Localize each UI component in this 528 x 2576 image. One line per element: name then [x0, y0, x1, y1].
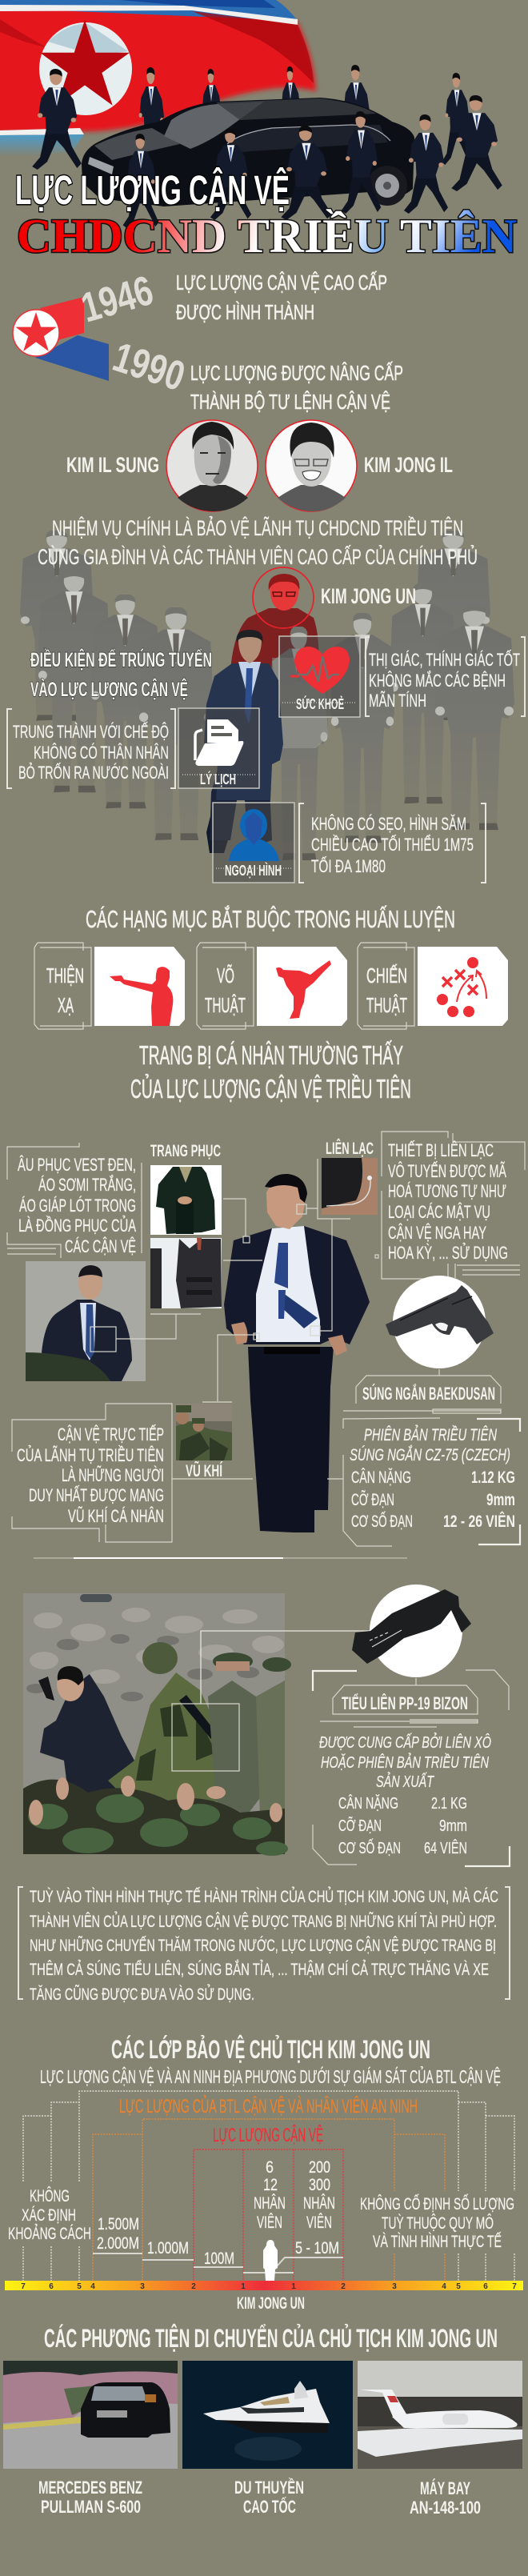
diagram: protection layers: 5	[456, 2282, 461, 2291]
runner guards in front of car	[32, 69, 502, 228]
photo: Mercedes	[3, 2361, 178, 2469]
photo: yacht	[182, 2361, 353, 2469]
panel: PP-19 Bizon specs: 9mm	[439, 1817, 467, 1835]
label: yacht: DU THUYỀN	[234, 2478, 304, 2498]
text: uniform description: ÁO SƠMI TRẮNG,	[38, 1175, 136, 1195]
panel: CZ-75 specs: CÂN NẶNG	[351, 1468, 411, 1487]
panel: martial arts	[197, 943, 347, 1029]
main figure with pistol harness	[224, 1174, 370, 1532]
panel: background check: LÝ LỊCH	[200, 771, 236, 787]
panel: tactics: CHIẾN	[366, 963, 407, 988]
label Kim Il Sung: KIM IL SUNG	[66, 453, 159, 477]
diagram: protection layers: 100M	[204, 2249, 234, 2268]
text: personal weapons: LÀ NHỮNG NGƯỜI	[62, 1465, 164, 1485]
panel: marksmanship: THIỆN	[46, 963, 84, 988]
title line 1: LỰC LƯỢNG CẬN VỆ	[15, 166, 290, 213]
diagram: protection layers: 6	[266, 2158, 274, 2177]
text: uniform description: LÀ ĐỒNG PHỤC CỦA	[18, 1216, 136, 1236]
photo: soldiers shooting	[176, 1404, 232, 1460]
text: background requirements: BỎ TRỐN RA NƯỚC NGOÀI	[18, 762, 169, 783]
text 1946 event: ĐƯỢC HÌNH THÀNH	[176, 300, 314, 324]
foreground grey guard	[270, 626, 328, 860]
diagram: protection layers: 2	[341, 2282, 346, 2291]
diagram: protection layers: 300	[309, 2176, 330, 2194]
panel: PP-19 Bizon specs: CƠ SỐ ĐẠN	[338, 1838, 401, 1857]
diagram: protection layers: 4	[442, 2282, 446, 2291]
main guard figure	[204, 630, 283, 853]
panel: CZ-75 specs: CỠ ĐẠN	[351, 1490, 394, 1509]
icon: PP-19 Bizon	[352, 1584, 471, 1677]
text 1990 event	[190, 361, 403, 414]
panel: PP-19 Bizon specs: SẢN XUẤT	[376, 1772, 434, 1791]
diagram: protection layers: XÁC ĐỊNH	[22, 2206, 76, 2225]
diagram: protection layers: 2.000M	[97, 2234, 139, 2253]
label: Mercedes: MERCEDES BENZ	[38, 2478, 142, 2498]
diagram: protection layers: 7	[512, 2282, 517, 2291]
text: personal weapons	[12, 1404, 172, 1542]
panel: appearance	[213, 803, 294, 883]
panel: CZ-75 specs: 9mm	[486, 1491, 515, 1509]
conditions heading	[30, 647, 212, 701]
panel: appearance: NGOẠI HÌNH	[225, 862, 282, 879]
diagram: protection layers: 1.500M	[98, 2215, 139, 2233]
label: airplane: AN-148-100	[410, 2498, 481, 2518]
conditions heading: ĐIỀU KIỆN ĐỂ TRÚNG TUYỂN	[30, 647, 212, 671]
panel: marksmanship: XẠ	[58, 993, 74, 1017]
diagram: protection layers: 1	[241, 2282, 246, 2291]
panel: tactics: THUẬT	[366, 993, 407, 1017]
diagram: protection layers: NHÂN	[254, 2194, 286, 2213]
panel: health: SỨC KHOẺ	[296, 695, 344, 712]
panel: PP-19 Bizon specs: CÂN NẶNG	[338, 1794, 398, 1813]
label: Baekdusan	[343, 1376, 501, 1413]
text: appearance requirements	[299, 803, 486, 883]
diagram: protection layers: 200	[309, 2158, 330, 2177]
text 1946 event	[176, 270, 387, 324]
diagram: protection layers: 5	[77, 2282, 82, 2291]
text: personal weapons: VŨ KHÍ CÁ NHÂN	[68, 1506, 164, 1526]
label: airplane: MÁY BAY	[420, 2478, 470, 2498]
photo: Kim with soldiers	[23, 1593, 291, 1856]
text: uniform description: CÁC CẬN VỆ	[65, 1236, 136, 1256]
mission text	[38, 515, 478, 569]
icon: Baekdusan pistol	[386, 1276, 494, 1368]
diagram: protection layers: 1.000M	[147, 2239, 189, 2258]
photo: guard by car	[26, 1261, 146, 1381]
label Kim Jong Il: KIM JONG IL	[364, 453, 453, 477]
diagram: protection layers: 7	[21, 2282, 26, 2291]
panel: PP-19 Bizon specs	[313, 1670, 510, 1866]
connectors	[116, 1159, 455, 1479]
year 1946: 1946	[76, 267, 158, 332]
photo: airplane	[358, 2361, 522, 2469]
portrait Kim Il Sung	[166, 420, 258, 511]
diagram: protection layers: 6	[49, 2282, 54, 2291]
panel: PP-19 Bizon specs: 64 VIÊN	[424, 1839, 467, 1857]
label: Mercedes: PULLMAN S-600	[41, 2497, 141, 2517]
title line 2: CHDCND TRIỀU TIÊN	[17, 210, 517, 262]
text 1946 event: LỰC LƯỢNG CẬN VỆ CAO CẤP	[176, 270, 387, 294]
diagram: protection layers: NHÂN	[303, 2194, 335, 2213]
diagram: protection layers: 5 - 10M	[295, 2239, 339, 2258]
label: yacht	[234, 2478, 304, 2517]
panel: tactics	[358, 943, 508, 1029]
background guards	[20, 530, 514, 843]
text: appearance requirements: TỐI ĐA 1M80	[311, 855, 386, 876]
panel: marksmanship	[34, 943, 185, 1029]
diagram: protection layers: 1	[291, 2282, 296, 2291]
label: communication: LIÊN LẠC	[326, 1139, 374, 1158]
text: uniform description	[7, 1143, 142, 1258]
diagram: protection layers: KHÔNG	[30, 2187, 70, 2205]
panel: martial arts: VÕ	[217, 963, 234, 988]
panel: martial arts: THUẬT	[205, 993, 246, 1017]
diagram: protection layers	[5, 2091, 523, 2313]
text: personal weapons: CẬN VỆ TRỰC TIẾP	[58, 1424, 164, 1444]
panel: health	[279, 636, 360, 717]
diagram: protection layers: 2	[191, 2282, 196, 2291]
text: background requirements: KHÔNG CÓ THÂN NHÂN	[34, 743, 169, 763]
callout: SMG zoom lines	[172, 1631, 370, 1771]
diagram: protection layers: VIÊN	[257, 2213, 282, 2232]
text: background requirements	[7, 709, 175, 788]
text: uniform description: ÂU PHỤC VEST ĐEN,	[18, 1155, 136, 1175]
diagram: protection layers: KIM JONG UN	[237, 2294, 305, 2313]
timeline icon: flag ribbon	[13, 297, 109, 381]
text: personal weapons: DUY NHẤT ĐƯỢC MANG	[29, 1485, 164, 1505]
label: airplane	[410, 2478, 481, 2518]
label: weapons: VŨ KHÍ	[186, 1461, 223, 1480]
text 1990 event: LỰC LƯỢNG ĐƯỢC NÂNG CẤP	[190, 361, 403, 385]
label Kim Jong Un: KIM JONG UN	[321, 584, 416, 608]
portrait Kim Jong Il	[266, 420, 357, 511]
photo: earpiece	[322, 1158, 378, 1215]
conditions heading: VÀO LỰC LƯỢNG CẬN VỆ	[30, 677, 188, 701]
diagram: protection layers: 4	[90, 2282, 95, 2291]
divider	[34, 1557, 407, 1559]
diagram: protection layers: 6	[483, 2282, 488, 2291]
diagram: protection layers: 12	[263, 2176, 278, 2194]
label: uniform: TRANG PHỤC	[150, 1142, 221, 1160]
diagram: protection layers: 3	[140, 2282, 145, 2291]
runner guards behind car	[135, 65, 472, 171]
panel: CZ-75 specs: CƠ SỐ ĐẠN	[351, 1512, 413, 1531]
diagram: protection layers: LỰC LƯỢNG CẬN VỆ	[213, 2125, 323, 2146]
panel: background check	[178, 708, 259, 788]
text: personal weapons: CỦA LÃNH TỤ TRIỀU TIÊN	[17, 1445, 164, 1465]
panel: PP-19 Bizon specs: CỠ ĐẠN	[338, 1816, 382, 1835]
limousine	[82, 98, 414, 206]
text block: deployment note	[18, 1887, 510, 2004]
photo: armor vest	[150, 1238, 222, 1308]
text: health requirements	[366, 637, 525, 716]
panel: CZ-75 specs	[343, 1418, 520, 1546]
header flag	[0, 0, 316, 157]
label: yacht: CAO TỐC	[243, 2496, 296, 2517]
panel: PP-19 Bizon specs: 2.1 KG	[431, 1795, 467, 1813]
text 1990 event: THÀNH BỘ TƯ LỆNH CẬN VỆ	[190, 390, 390, 414]
text: health requirements: MÃN TÍNH	[369, 691, 426, 711]
text: uniform description: ÁO GIÁP LÓT TRONG	[19, 1196, 136, 1216]
label: Mercedes	[38, 2478, 142, 2517]
text: radio description	[375, 1132, 525, 1279]
text: background requirements: TRUNG THÀNH VỚI CHẾ ĐỘ	[13, 722, 169, 742]
diagram: protection layers: 3	[392, 2282, 397, 2291]
photo: jacket	[150, 1165, 222, 1235]
heading: equipment	[130, 1040, 411, 1104]
diagram: protection layers: VIÊN	[306, 2213, 332, 2232]
portrait Kim Jong Un	[230, 567, 318, 676]
diagram: protection layers: KHOẢNG CÁCH	[8, 2225, 91, 2243]
year 1990: 1990	[107, 334, 190, 400]
text block: deployment note: TĂNG CŨNG ĐƯỢC ĐƯA VÀO SỬ DỤNG.	[30, 1985, 254, 2004]
